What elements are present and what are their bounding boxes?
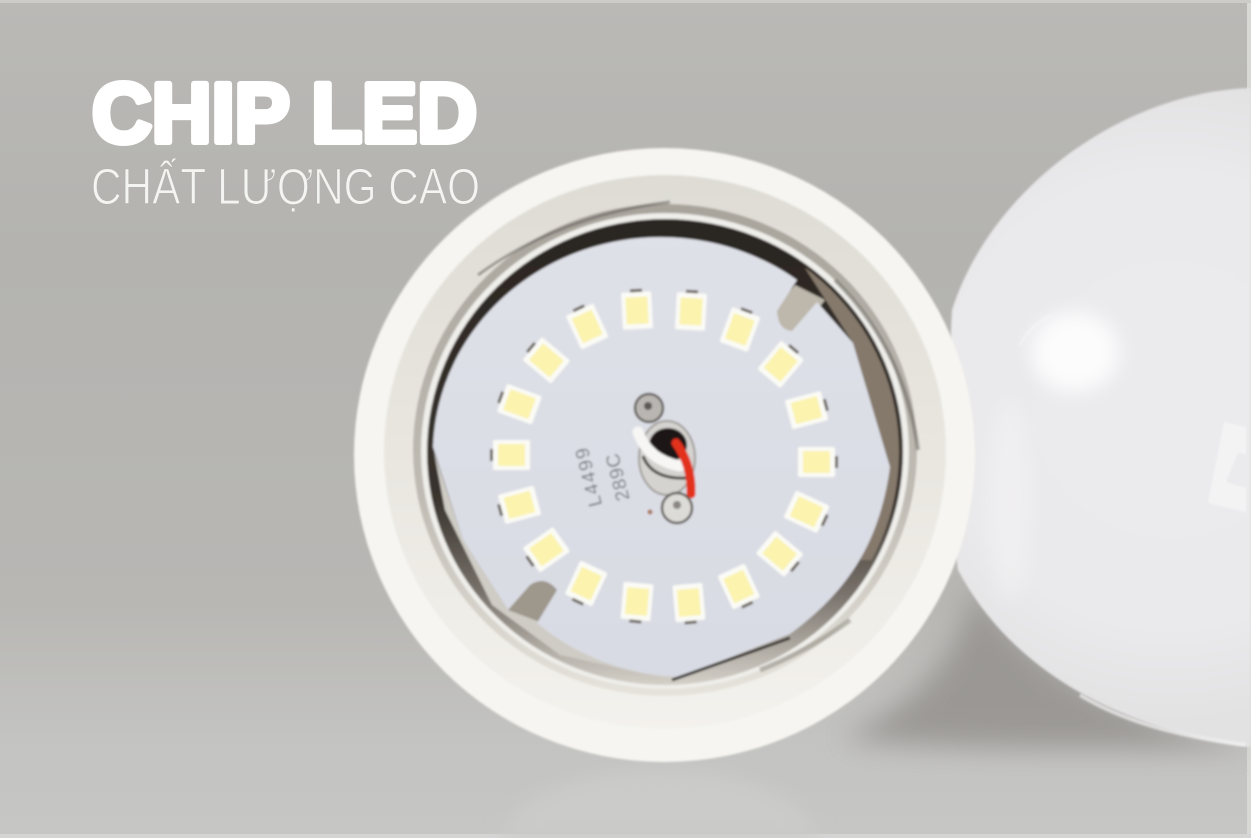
red wire [676, 443, 691, 494]
LED chip 15 [490, 440, 530, 470]
bulb base ring [354, 148, 975, 762]
lower left silver wall [434, 452, 680, 682]
LED chip 14 [495, 486, 541, 525]
collar highlight [421, 213, 909, 689]
LED chip 3 [719, 304, 761, 352]
LED circuit board [433, 237, 890, 677]
bulb highlight [1031, 312, 1119, 392]
bulb glint [1020, 315, 1052, 345]
bulb dome [949, 88, 1251, 747]
metal collar [413, 204, 917, 696]
lower hole ring [643, 456, 688, 478]
collar streak top [478, 202, 670, 275]
LED chip 8 [756, 530, 806, 579]
collar streak right [835, 280, 918, 450]
bottom reflection [500, 770, 820, 838]
LED chip 10 [672, 583, 706, 625]
top solder screw [635, 394, 663, 422]
LED chip 13 [520, 527, 570, 574]
centre hole and wires [635, 394, 695, 523]
board lower right shadow edge [672, 638, 790, 680]
subtitle: CHẤT LƯỢNG CAO [91, 157, 480, 215]
collar streak bottom right [760, 620, 850, 670]
inner wall wedge [804, 267, 900, 561]
cast shadow [840, 585, 1251, 749]
LED chip 5 [785, 390, 831, 429]
bulb shine band [988, 400, 1032, 600]
small red dot [648, 510, 652, 514]
board marking 289C: 289C [603, 451, 635, 503]
white wire [638, 432, 680, 466]
LED chip 16 [494, 383, 542, 425]
bulb logo [1208, 422, 1246, 512]
LED ring [490, 288, 838, 625]
LED chip 6 [798, 447, 838, 477]
outer ring [354, 148, 975, 762]
bottom slot metal [505, 576, 560, 628]
LED chip 9 [717, 563, 761, 612]
LED chip 1 [621, 288, 653, 330]
LED chip 12 [564, 560, 608, 609]
LED chip 4 [757, 338, 806, 388]
dark gap [427, 219, 903, 685]
bulb rim [1080, 695, 1246, 745]
LED chip 17 [520, 335, 570, 384]
solder hole [639, 421, 695, 495]
top slot metal [772, 285, 825, 338]
hole interior [649, 428, 687, 462]
LED chip 11 [620, 582, 654, 624]
LED chip 7 [783, 490, 832, 534]
board marking L4499: L4499 [572, 445, 607, 509]
title: CHIP LED [92, 66, 477, 160]
LED chip 2 [675, 289, 707, 331]
bottom solder screw [662, 493, 692, 523]
LED chip 18 [565, 301, 609, 350]
ring inner face [384, 175, 946, 729]
